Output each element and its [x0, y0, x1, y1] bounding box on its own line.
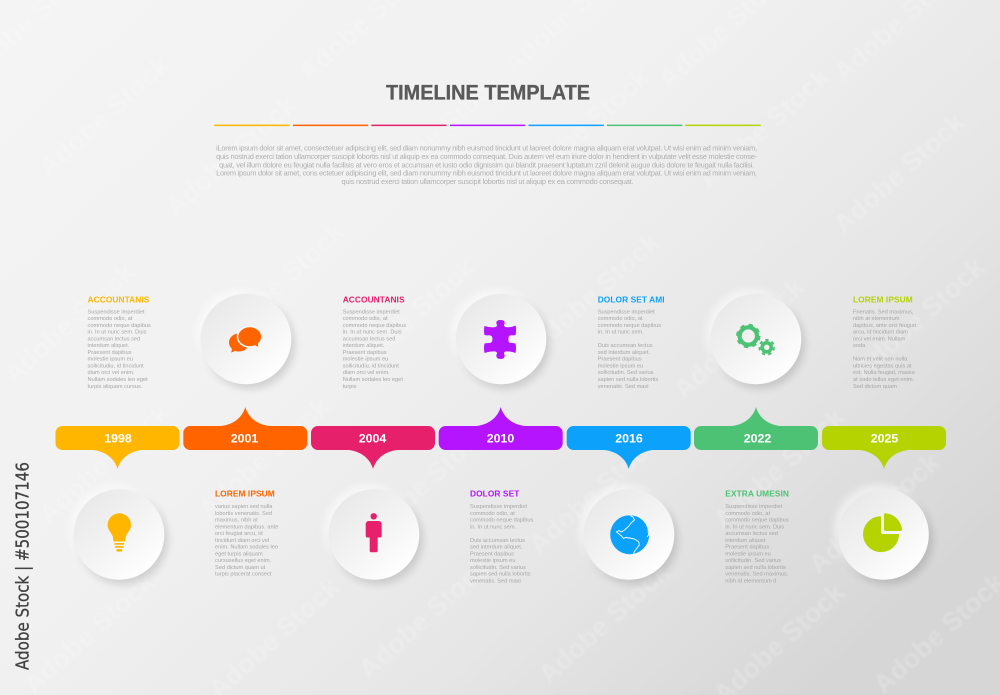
text block: Lorem ipsum 2001: orci feugiat arcu, id	[215, 531, 263, 537]
stock credit: Adobe Stock | #500107146	[14, 462, 34, 670]
icon: puzzle piece	[484, 320, 516, 359]
timeline bar: 1998: 1998	[104, 431, 132, 445]
text block: Accountanis 2004: Suspendisse imperdiet	[343, 309, 400, 315]
text block: Dolor set ami 2016: venenatis. Sed maxi	[598, 384, 648, 390]
intro paragraph: quis nostrud exerci tation ullamcorper suscipit lobortis nisl ut aliquip ex ea commodo consequat.	[342, 177, 634, 186]
text block: Accountanis 1998: Suspendisse imperdiet	[88, 309, 145, 315]
text block: Dolor set ami 2016: commodo neque dapibus	[598, 323, 661, 329]
text block: Extra umesin 2022: accumsan lectus sed	[725, 531, 778, 537]
text block: Lorem ipsum 2025: Nam et velit non nulla	[853, 357, 908, 363]
disc: gears icon 2022	[706, 289, 805, 389]
text block: Lorem ipsum 2025: orci vel enim. Nullam	[853, 336, 906, 342]
text block: Lorem ipsum 2025: Fnenatis. Sed maximus,	[853, 309, 914, 315]
watermarks: Adobe Stock	[693, 61, 836, 195]
text block: Lorem ipsum 2001: maximus, nibh at	[215, 518, 258, 524]
text block: Accountanis 1998	[88, 294, 152, 390]
text block: Dolor set 2010: molestie ipsum eu	[470, 558, 515, 564]
text block: Accountanis 1998: commodo odio, at	[88, 316, 133, 322]
text block: Accountanis 2004: commodo neque dapibus	[343, 323, 406, 329]
text block: Dolor set ami 2016	[598, 294, 665, 390]
timeline bar: 2022	[694, 407, 818, 450]
title: TIMELINE TEMPLATE	[386, 81, 590, 104]
text block: Lorem ipsum 2025: at sodo tellus eget enim.	[853, 377, 915, 383]
text block: Lorem ipsum 2025: LOREM IPSUM	[853, 294, 913, 304]
text block: Extra umesin 2022: sapien sed nulla lobortis	[725, 565, 786, 571]
text block: Dolor set 2010: sollicitudin. Sed varius	[470, 565, 526, 571]
text block: Lorem ipsum 2025: ultricies egestas quis at	[853, 364, 912, 370]
text block: Extra umesin 2022: sollicitudin. Sed varius	[725, 558, 781, 564]
text block: Lorem ipsum 2001: cursusellus eget enim.	[215, 558, 272, 564]
timeline bar: 2016: 2016	[615, 431, 643, 445]
text block: Lorem ipsum 2025: est. Nulla feugiat, massa	[853, 370, 916, 376]
timeline bar: 2010: 2010	[487, 431, 514, 445]
text block: Dolor set 2010	[470, 488, 535, 584]
text block: Dolor set 2010: Duis accumsan lectus	[470, 538, 525, 544]
watermarks: Adobe Stock	[523, 426, 666, 560]
text block: Extra umesin 2022: molestie ipsum eu	[725, 551, 771, 557]
timeline bar: 2001	[183, 407, 307, 450]
watermarks: Adobe Stock	[828, 106, 971, 240]
text block: Accountanis 1998: interdum aliquet.	[88, 343, 130, 349]
text block: Accountanis 2004: molestie ipsum eu	[343, 357, 388, 363]
timeline bar: 2001: 2001	[231, 431, 258, 445]
intro paragraph: quis nostrud exerci tation ullamcorper suscipit lobortis nisl ut aliquip ex ea commodo consequat. Duis autem vel eum iriure dolor in hendrerit in vulputate velit esse molestie conse-	[216, 152, 758, 161]
text block: Accountanis 2004: turpis	[343, 384, 357, 390]
text block: Accountanis 2004: diam orci vel enim.	[343, 370, 390, 376]
watermarks: Adobe Stock	[353, 551, 496, 685]
text block: Extra umesin 2022: interdum aliquet.	[725, 538, 767, 544]
timeline bar: 1998	[56, 426, 180, 469]
timeline bar: 2004: 2004	[359, 431, 386, 445]
text block: Dolor set ami 2016: Suspendisse imperdiet	[598, 309, 655, 315]
text block: Lorem ipsum 2025: dapibus, ante orci feugiat	[853, 323, 916, 329]
text block: Dolor set 2010: commodo odio, at	[470, 511, 515, 517]
text block: Extra umesin 2022: Praesent dapibus	[725, 545, 769, 551]
text block: Dolor set 2010: sapien sed nulla lobortis	[470, 572, 531, 578]
timeline bar: 2025	[822, 426, 946, 469]
text block: Lorem ipsum 2025: Sed dictum quam	[853, 384, 897, 390]
icon: person	[366, 513, 382, 552]
text block: Lorem ipsum 2001: Sed dictum quam ut	[215, 565, 266, 571]
text block: Dolor set 2010: sed interdum aliquet.	[470, 545, 523, 551]
disc: person icon 2004	[324, 484, 423, 584]
disc: chat icon 2001	[196, 289, 295, 389]
text block: Extra umesin 2022: in. In ut nunc sem. Duis	[725, 524, 784, 530]
intro paragraph: Lorem ipsum dolor sit amet, cons ectetuer adipiscing elit, sed diam nonummy nibh euismod tincidunt ut laoreet dolore magna aliquam erat volutpat. Ut wisi enim ad minim veniam,	[216, 169, 757, 178]
text block: Lorem ipsum 2001: LOREM IPSUM	[215, 488, 275, 498]
timeline bar: 2025: 2025	[871, 431, 898, 445]
text block: Extra umesin 2022: nibh at elementum d	[725, 578, 776, 584]
text block: Lorem ipsum 2001: varius sapien sed nulla	[215, 504, 273, 510]
text block: Dolor set 2010: Praesent dapibus	[470, 551, 514, 557]
icon: pie chart	[863, 513, 902, 552]
text block: Extra umesin 2022: commodo odio, at	[725, 511, 771, 517]
watermarks: Adobe Stock	[0, 256, 141, 390]
watermarks: Adobe Stock	[668, 271, 811, 405]
text block: Dolor set ami 2016: sapien sed nulla lobortis	[598, 377, 658, 383]
text block: Lorem ipsum 2025: nibh at elementum	[853, 316, 900, 322]
text block: Accountanis 2004: Praesent dapibus	[343, 350, 387, 356]
text block: Dolor set 2010: Suspendisse imperdiet	[470, 504, 527, 510]
text block: Accountanis 1998: accumsan lectus sed	[88, 336, 140, 342]
watermarks: Adobe Stock	[848, 251, 991, 385]
text block: Accountanis 1998: ACCOUNTANIS	[88, 294, 150, 304]
text block: Accountanis 1998: in. In ut nunc sem. Duis	[88, 330, 147, 336]
watermarks: Adobe Stock	[366, 66, 509, 200]
text block: Lorem ipsum 2025	[853, 294, 918, 390]
disc: puzzle icon 2010	[451, 289, 550, 389]
text block: Lorem ipsum 2001: elementum dapibus, ante	[215, 524, 278, 530]
text block: Accountanis 2004	[343, 294, 408, 390]
timeline bar: 2010	[439, 407, 563, 450]
text block: Accountanis 1998: diam orci vel enim.	[88, 370, 135, 376]
text block: Accountanis 1998: molestie ipsum eu	[88, 357, 133, 363]
text block: Lorem ipsum 2025: arcu, id tincidunt diam	[853, 330, 908, 336]
text block: Accountanis 2004: interdum aliquet.	[343, 343, 385, 349]
text block: Dolor set ami 2016: in. In ut nunc sem.	[598, 330, 644, 336]
watermarks: Adobe Stock	[533, 556, 676, 690]
icon: globe	[610, 515, 649, 554]
intro paragraph: iLorem ipsum dolor sit amet, consectetuer adipiscing elit, sed diam nonummy nibh euismod tincidunt ut laoreet dolore magna aliquam erat volutpat. Ut wisi enim ad minim veniam,	[216, 144, 757, 153]
text block: Accountanis 2004: sollicitudiu, id tincidunt	[343, 364, 399, 370]
icon: gears	[737, 325, 774, 355]
text block: Accountanis 2004: accumsan lectus sed	[343, 336, 395, 342]
disc: pie chart icon 2025	[834, 484, 933, 584]
watermarks: Adobe Stock	[523, 226, 666, 360]
text block: Extra umesin 2022: EXTRA UMESIN	[725, 488, 789, 498]
text block: Lorem ipsum 2025: soda	[853, 343, 866, 349]
text block: Accountanis 2004: commodo odio, at	[343, 316, 388, 322]
text block: Accountanis 1998: sollicitudiu, id tincidunt	[88, 364, 144, 370]
text block: Dolor set ami 2016: Duis accumsan lectus	[598, 343, 653, 349]
text block: Lorem ipsum 2001: lobortis venenatis. Sed	[215, 511, 272, 517]
watermarks: Adobe Stock	[513, 61, 656, 195]
intro paragraph: quat, vel illum dolore eu feugiat nulla facilisis at vero eros et accumsan et iusto odio dignissim qui blandit praesent luptatum zzril delenit augue duis dolore te feugait nulla facilisi.	[219, 160, 754, 169]
watermarks: Adobe Stock	[33, 396, 176, 530]
text block: Dolor set ami 2016: molestie ipsum eu	[598, 364, 643, 370]
text block: Accountanis 1998: Praesent dapibus	[88, 350, 132, 356]
text block: Extra umesin 2022: commodo neque dapibus	[725, 518, 789, 524]
text block: Extra umesin 2022	[725, 488, 790, 584]
text block: Dolor set ami 2016: DOLOR SET AMI	[598, 294, 665, 304]
text block: Dolor set 2010: in. In ut nunc sem.	[470, 524, 517, 530]
timeline bar: 2022: 2022	[744, 431, 771, 445]
text block: Dolor set ami 2016: commodo odio, at	[598, 316, 643, 322]
text block: Lorem ipsum 2001: tincidunt diam orci vel	[215, 538, 269, 544]
watermarks: Adobe Stock	[803, 446, 946, 580]
watermarks: Adobe Stock	[160, 89, 303, 223]
watermarks: Adobe Stock	[353, 416, 496, 550]
text block: Accountanis 1998: turpis aliquam cursus.	[88, 384, 143, 390]
text block: Accountanis 2004: ACCOUNTANIS	[343, 294, 405, 304]
text block: Accountanis 2004: Nullam sodales leo eget	[343, 377, 403, 383]
watermarks: Adobe Stock	[708, 401, 851, 535]
text block: Dolor set ami 2016: Praesent dapibus	[598, 357, 642, 363]
text block: Dolor set ami 2016: sed interdum aliquet.	[598, 350, 650, 356]
text block: Lorem ipsum 2001: enim. Nullam sodales leo	[215, 545, 278, 551]
icon: speech bubbles	[229, 326, 262, 352]
icon: light bulb	[108, 513, 131, 552]
watermarks: Adobe Stock	[33, 49, 176, 183]
text block: Lorem ipsum 2001	[215, 488, 280, 578]
watermarks: Adobe Stock	[208, 216, 351, 350]
timeline bar: 2016	[567, 426, 691, 469]
text block: Dolor set 2010: commodo neque dapibus	[470, 518, 534, 524]
text block: Extra umesin 2022: Suspendisse imperdiet	[725, 504, 783, 510]
text block: Dolor set 2010: venenatis. Sed maxi	[470, 578, 521, 584]
text block: Lorem ipsum 2001: eget turpis aliquam	[215, 551, 263, 557]
timeline bar: 2004	[311, 426, 435, 469]
watermarks: Adobe Stock	[338, 251, 481, 385]
text block: Extra umesin 2022: venenatis. Sed maximus,	[725, 572, 789, 578]
disc: light bulb icon 1998	[69, 484, 168, 584]
text block: Accountanis 1998: Nullam sodales leo eget	[88, 377, 148, 383]
text block: Dolor set ami 2016: sollicitudin. Sed varius	[598, 370, 654, 376]
colored divider segments	[214, 125, 761, 126]
watermarks: Adobe Stock	[193, 391, 336, 525]
text block: Accountanis 1998: commodo neque dapibus	[88, 323, 151, 329]
text block: Dolor set 2010: DOLOR SET	[470, 488, 519, 498]
disc: globe icon 2016	[579, 484, 678, 584]
text block: Accountanis 2004: in. In ut nunc sem. Duis	[343, 330, 402, 336]
text block: Lorem ipsum 2001: turpis placerat consect	[215, 572, 272, 578]
